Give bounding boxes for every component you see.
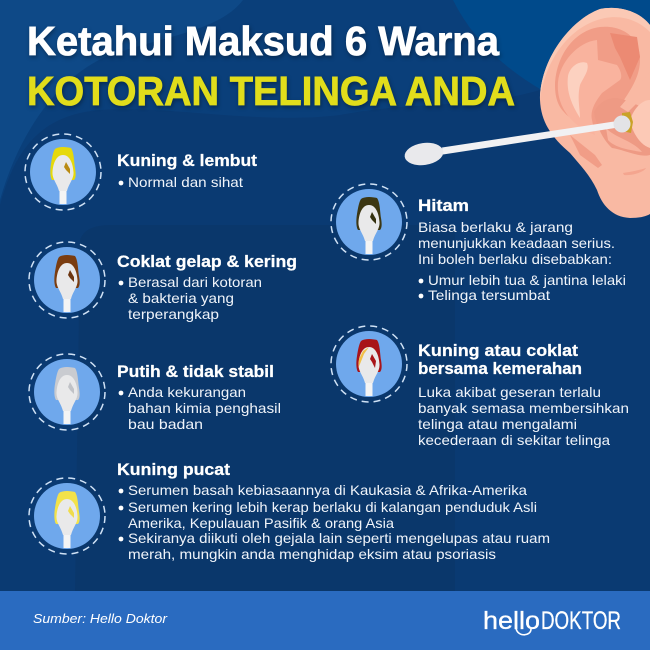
title: Ketahui Maksud 6 Warna — [27, 18, 500, 64]
source credit: Sumber: Hello Doktor — [33, 611, 168, 626]
text: kuning pucat: Serumen basah kebiasaannya di Kaukasia & Afrika-Amerika — [128, 482, 527, 498]
text: coklat gelap & kering — [117, 253, 297, 322]
text: kuning & lembut — [117, 152, 258, 190]
text: putih & tidak stabil — [117, 363, 281, 432]
text: hitam: Hitam — [418, 197, 469, 215]
text: coklat gelap & kering: & bakteria yang — [128, 290, 234, 306]
text: hitam: Telinga tersumbat — [428, 287, 550, 303]
text: kuning pucat: Sekiranya diikuti oleh gejala lain seperti mengelupas atau ruam — [128, 530, 550, 546]
text: kuning atau coklat bersama kemerahan — [418, 342, 629, 448]
text: coklat gelap & kering: Coklat gelap & kering — [117, 253, 297, 271]
title — [27, 18, 515, 114]
icon: yellow swab — [25, 134, 101, 210]
cotton swab — [403, 116, 630, 168]
text: putih & tidak stabil: bahan kimia penghasil — [128, 400, 281, 416]
text: hitam: menunjukkan keadaan serius. — [418, 235, 615, 251]
text: kuning atau coklat bersama kemerahan: telinga atau mengalami — [418, 416, 577, 432]
text: hitam: Ini boleh berlaku disebabkan: — [418, 251, 612, 267]
text: kuning pucat: Kuning pucat — [117, 461, 231, 479]
illustration: ear with cotton swab — [403, 8, 650, 218]
text: hitam: Umur lebih tua & jantina lelaki — [428, 272, 626, 288]
text: putih & tidak stabil: Anda kekurangan — [128, 384, 246, 400]
icon: black swab — [331, 184, 407, 260]
icon: pale yellow swab — [29, 478, 105, 554]
text: kuning pucat — [117, 461, 550, 562]
title: KOTORAN TELINGA ANDA — [27, 68, 515, 114]
footer band — [0, 591, 650, 650]
logo: helloDOKTOR — [483, 607, 621, 635]
icon: red swab — [331, 326, 407, 402]
text: kuning atau coklat bersama kemerahan: Kuning atau coklat — [418, 342, 579, 360]
icon: white swab — [29, 354, 105, 430]
text: kuning pucat: Serumen kering lebih kerap berlaku di kalangan penduduk Asli — [128, 499, 537, 515]
text: kuning & lembut: Normal dan sihat — [128, 174, 243, 190]
text: kuning atau coklat bersama kemerahan: Luka akibat geseran terlalu — [418, 384, 601, 400]
logo: helloDOKTOR: DOKTOR — [541, 607, 621, 635]
text: kuning & lembut: Kuning & lembut — [117, 152, 258, 170]
text: hitam: Biasa berlaku & jarang — [418, 219, 573, 235]
text: coklat gelap & kering: Berasal dari kotoran — [128, 274, 262, 290]
icon: dark brown swab — [29, 242, 105, 318]
text: kuning atau coklat bersama kemerahan: kecederaan di sekitar telinga — [418, 432, 610, 448]
text: kuning atau coklat bersama kemerahan: banyak semasa membersihkan — [418, 400, 629, 416]
text: hitam — [418, 197, 626, 303]
text: coklat gelap & kering: terperangkap — [128, 306, 219, 322]
text: kuning pucat: merah, mungkin anda menghidap eksim atau psoriasis — [128, 546, 496, 562]
logo: helloDOKTOR: hello — [483, 607, 540, 635]
text: kuning atau coklat bersama kemerahan: bersama kemerahan — [418, 360, 582, 378]
text: putih & tidak stabil: bau badan — [128, 416, 203, 432]
text: putih & tidak stabil: Putih & tidak stabil — [117, 363, 274, 381]
text: kuning pucat: Amerika, Kepulauan Pasifik & orang Asia — [128, 515, 394, 531]
